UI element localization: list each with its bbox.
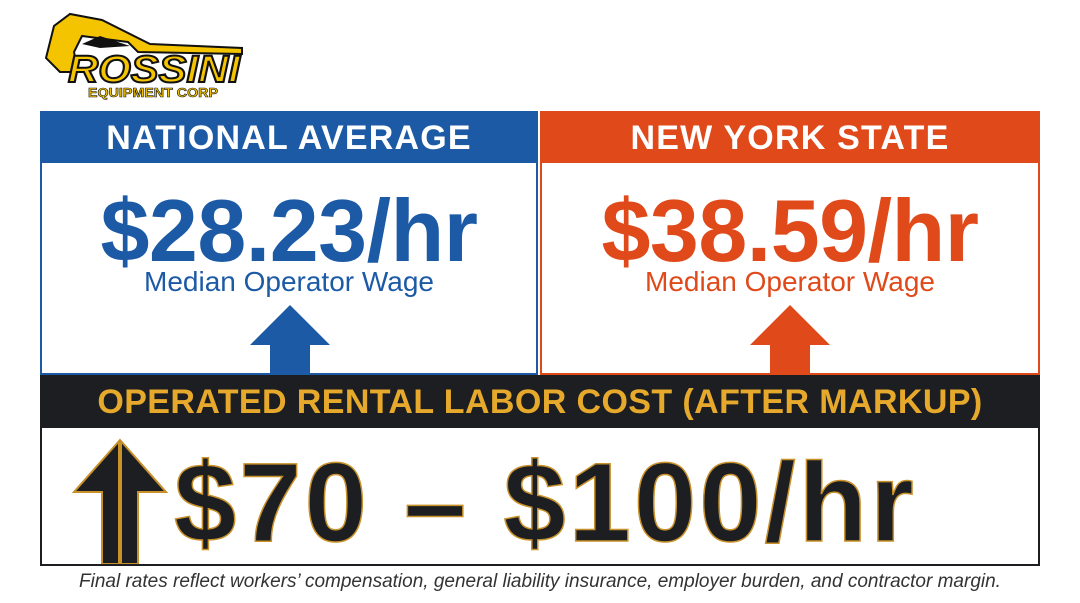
heading: national average: NATIONAL AVERAGE: [106, 119, 472, 157]
logo: ROSSINI: [68, 49, 242, 91]
logo: [44, 12, 243, 100]
text: ny wage: $38.59/hr: [601, 181, 979, 280]
arrow: blue: [250, 305, 330, 373]
panel: cost range: [40, 428, 1040, 566]
panel: national average: [40, 111, 538, 375]
heading: new york state: NEW YORK STATE: [630, 119, 950, 157]
band: operated rental labor cost: [40, 375, 1040, 428]
icon: double up arrow: [72, 438, 168, 564]
text: national label: Median Operator Wage: [144, 266, 434, 297]
arrow: orange: [750, 305, 830, 373]
text: national wage: $28.23/hr: [100, 181, 478, 280]
text: cost range: $70 – $100/hr: [174, 440, 917, 565]
icon: excavator arm: [46, 14, 242, 72]
heading: national average: [40, 111, 538, 163]
band: operated rental labor cost: OPERATED RENTAL LABOR COST (AFTER MARKUP): [97, 383, 983, 421]
heading: new york state: [540, 111, 1040, 163]
logo: EQUIPMENT CORP: [88, 85, 218, 100]
panel: new york: [540, 111, 1040, 375]
footnote: Final rates reflect workers’ compensation, general liability insurance, employer burden, and contractor margin.: [79, 571, 1001, 592]
text: ny label: Median Operator Wage: [645, 266, 935, 297]
